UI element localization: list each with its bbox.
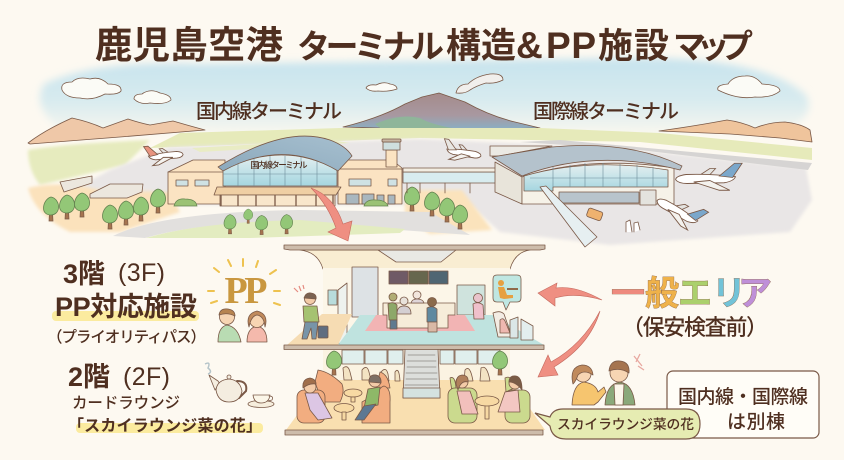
title: 施設 — [598, 27, 669, 66]
clouds — [62, 74, 780, 104]
icon: teapot — [205, 363, 246, 402]
highlight: lounge name — [76, 423, 263, 433]
side face — [495, 162, 522, 204]
title: 構造 — [446, 27, 516, 66]
icon: PP badge — [208, 259, 280, 312]
arrow: general area to 2F — [538, 311, 600, 377]
title: 鹿児島空港 — [95, 24, 284, 66]
elevator block — [352, 267, 378, 317]
apron plane blue tail — [652, 187, 709, 235]
icon: teacup — [248, 395, 274, 408]
lounge tables left — [334, 389, 362, 420]
heading: 3F: 3階 — [63, 259, 105, 289]
sparkle — [634, 354, 644, 370]
2F wall — [323, 349, 510, 381]
heading: general area: ア — [738, 275, 772, 313]
orange lounge chairs — [297, 370, 390, 423]
text: card lounge: カードラウンジ — [72, 394, 180, 412]
pink rug — [365, 315, 475, 331]
volcano green slopes — [375, 116, 452, 128]
left field — [28, 140, 150, 185]
heading: 2F: (2F) — [123, 363, 170, 391]
arrow: terminal to cutaway — [311, 188, 352, 241]
annex door — [640, 190, 656, 205]
staff and travellers 3F — [388, 291, 484, 332]
title: ターミナル — [297, 28, 444, 65]
teal door — [457, 285, 485, 315]
seated women right — [456, 375, 522, 414]
sand left — [28, 184, 180, 232]
heading: general area: 般 — [645, 275, 679, 313]
international terminal — [490, 146, 682, 205]
label: domestic terminal: 国内線ターミナル — [196, 100, 342, 123]
security gates — [493, 312, 533, 340]
indoor plants — [326, 351, 508, 375]
runway — [520, 140, 812, 170]
3F teal floor — [338, 315, 544, 345]
grass between taxiways — [192, 140, 350, 152]
departure boards — [389, 271, 448, 284]
panel: airport aerial scene — [28, 58, 812, 247]
heading: general area: 一 — [611, 275, 645, 313]
heading: general area: エ — [678, 275, 712, 313]
title: & — [516, 25, 543, 66]
excitement marks — [294, 285, 304, 292]
callout: Sky Lounge: スカイラウンジ菜の花 — [557, 417, 694, 432]
label: international terminal: 国際線ターミナル — [533, 100, 679, 123]
heading: 3F: (3F) — [118, 259, 165, 287]
icon: couple — [572, 361, 635, 405]
connector tree — [404, 187, 420, 211]
panel: terminal cutaway — [284, 245, 545, 435]
3F left floor — [287, 314, 352, 345]
entrance canopy — [214, 187, 341, 195]
glass hall — [223, 155, 337, 186]
back block — [490, 146, 552, 156]
ground floor glass — [559, 192, 639, 203]
side door — [338, 283, 347, 345]
green lounge chairs — [448, 377, 530, 423]
international plane far — [442, 139, 483, 164]
apron — [45, 139, 812, 245]
note box: 国内線・国際線 — [678, 386, 808, 408]
sand right — [405, 190, 492, 234]
domestic plane — [144, 143, 184, 166]
floor slabs — [284, 345, 544, 435]
connecting walkway — [403, 168, 505, 193]
left wing — [168, 160, 225, 204]
note box: は別棟 — [727, 411, 785, 433]
callout: Sky Lounge — [535, 409, 700, 439]
parked plane blue tail — [676, 163, 742, 190]
front trees — [224, 209, 293, 235]
green island — [146, 220, 405, 238]
man — [605, 361, 635, 405]
volcano Sakurajima — [343, 93, 540, 130]
heading: PP facilities: PP対応施設 — [55, 292, 197, 322]
2F floor — [286, 380, 545, 430]
green strip — [150, 128, 812, 160]
skylight — [378, 250, 456, 262]
wall sign — [328, 290, 337, 305]
left mountains — [28, 118, 205, 144]
heading: 2F — [68, 362, 170, 392]
arched roof — [218, 136, 352, 171]
right trees — [424, 192, 468, 229]
glazing — [524, 165, 668, 191]
escalator — [403, 349, 440, 398]
road — [113, 210, 470, 238]
note box — [667, 371, 819, 438]
icon: lounge speech bubble — [493, 275, 521, 310]
small hangars — [60, 176, 143, 198]
heading: 3F — [63, 259, 165, 289]
shrubs — [174, 199, 388, 206]
seated man left — [355, 375, 381, 420]
ground crew — [626, 220, 640, 232]
lounge table right — [475, 396, 499, 419]
building sign: 国内線ターミナル — [250, 160, 308, 170]
icon: PP badge: PP — [224, 270, 268, 312]
service vehicle — [586, 208, 603, 221]
heading: general area — [611, 275, 772, 313]
domestic terminal — [168, 136, 402, 235]
heading: 2F: 2階 — [68, 362, 110, 392]
text: priority pass: （プライオリティパス） — [47, 328, 206, 346]
highlight: PP — [52, 311, 199, 321]
text: before security: （保安検査前） — [622, 315, 768, 340]
icon: PP couple — [218, 309, 267, 342]
left trees — [44, 189, 166, 229]
woman — [572, 365, 606, 405]
reception counter — [383, 303, 455, 328]
roof slab — [284, 245, 545, 250]
right mountains — [659, 120, 812, 142]
title: マップ — [673, 28, 753, 65]
text: lounge name: 「スカイラウンジ菜の花」 — [68, 416, 262, 435]
arrow: general area to 3F — [538, 283, 602, 306]
back seats — [343, 367, 490, 381]
sky — [40, 58, 809, 136]
title — [95, 24, 753, 66]
heading: general area: リ — [712, 275, 746, 313]
front face — [522, 163, 674, 204]
roof — [492, 146, 682, 176]
seated woman left — [303, 378, 332, 420]
jet bridge — [540, 186, 597, 247]
3F ceiling — [300, 250, 530, 269]
right wing — [338, 160, 402, 204]
title: PP — [546, 25, 596, 66]
traveller with suitcase — [302, 293, 328, 339]
2F windows — [342, 350, 500, 364]
3F back wall — [323, 268, 510, 346]
control tower — [386, 150, 397, 167]
